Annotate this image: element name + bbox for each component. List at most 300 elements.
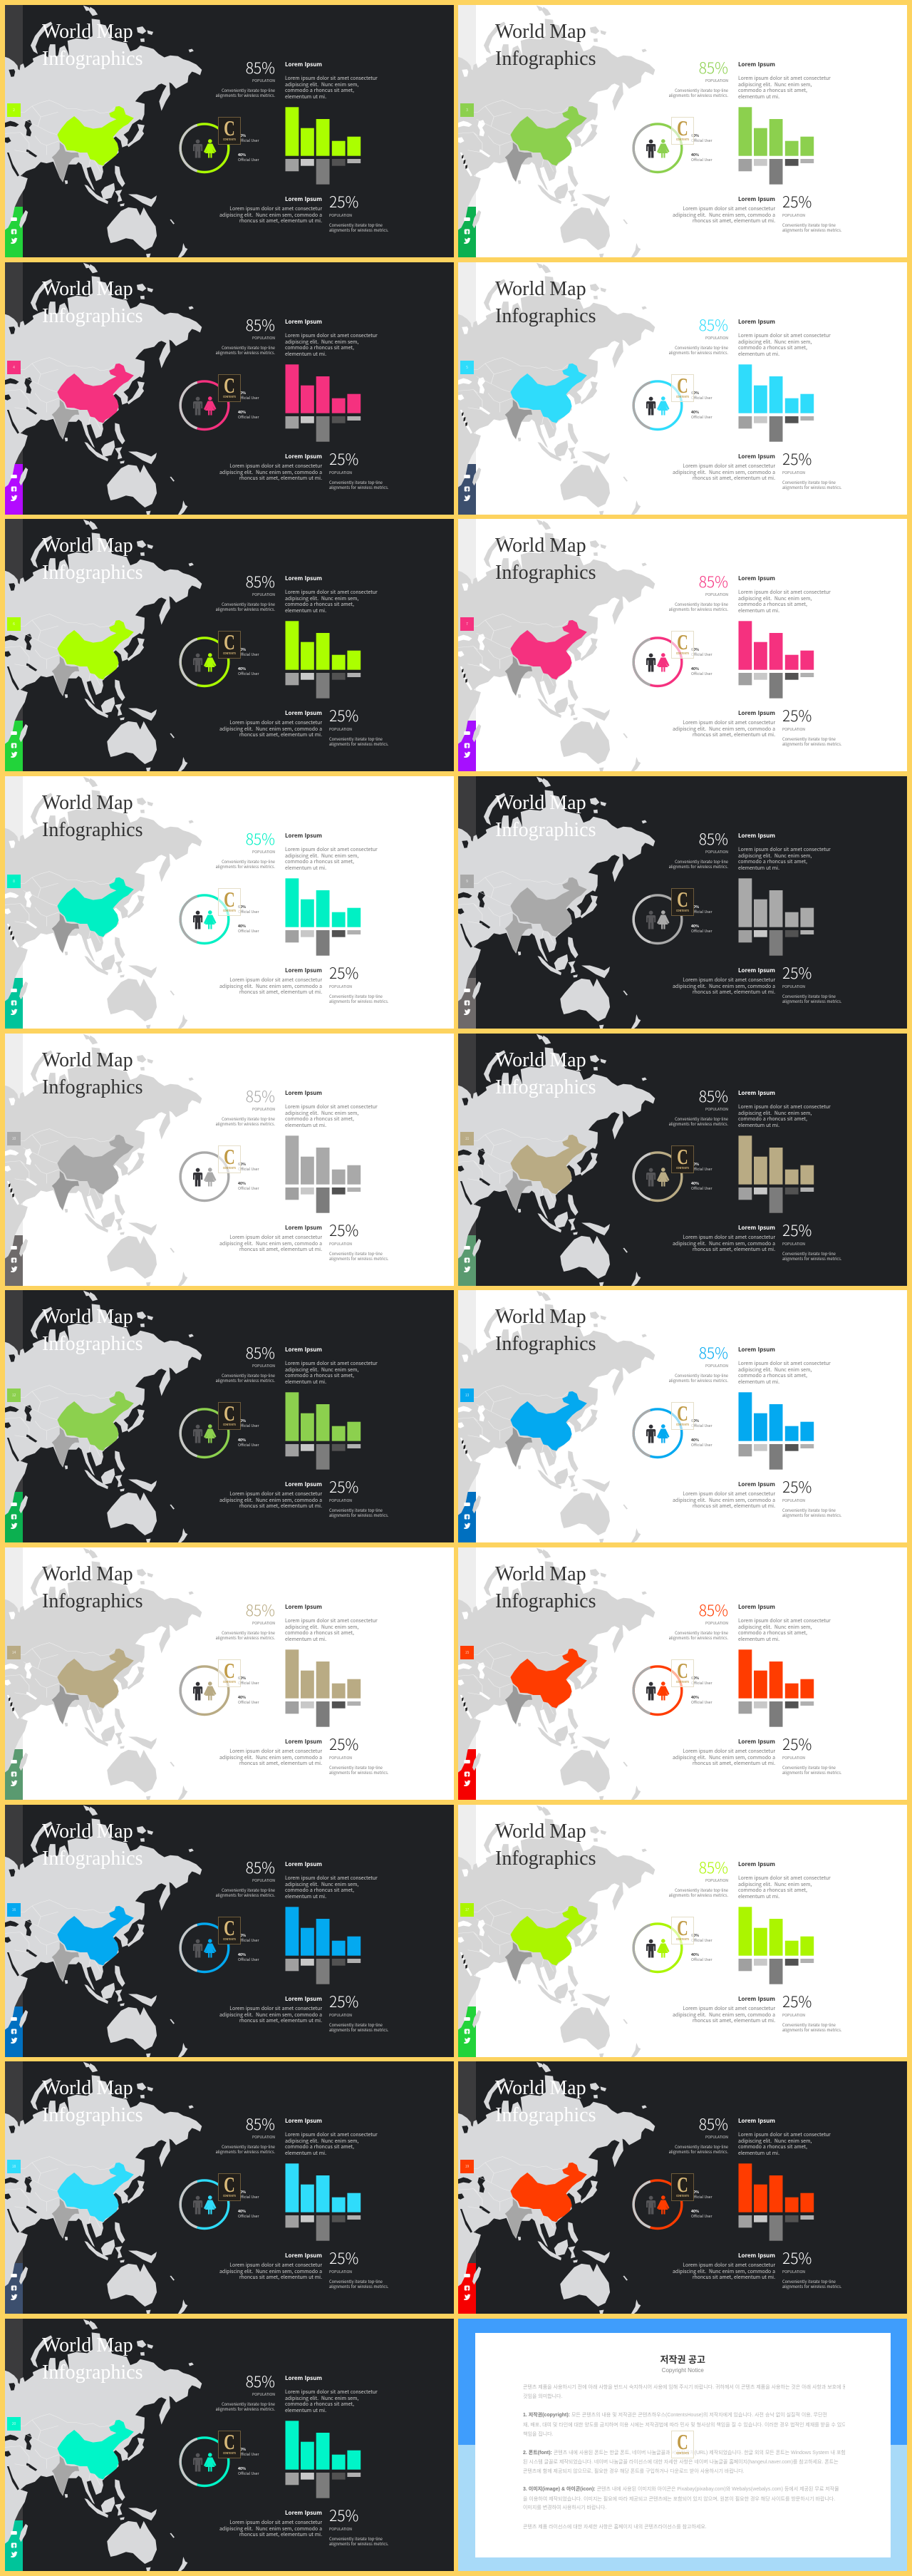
stat: 25% population <box>782 1736 868 1775</box>
title: Infographics <box>42 2104 143 2126</box>
page number tab: 4 <box>13 365 15 370</box>
title <box>42 1561 143 1615</box>
stat: 85% population: POPULATION <box>705 1364 728 1369</box>
legend <box>691 647 712 676</box>
text block: Lorem ipsum dolor sit amet consectetur adipiscing elit. Nunc enim sem, commodo a rhoncus sit amet, elementum ut mi. <box>285 2388 378 2413</box>
text block: Lorem ipsum dolor sit amet consectetur adipiscing elit. Nunc enim sem, commodo a rhoncus sit amet, elementum ut mi. <box>285 331 378 357</box>
bottom text block: Lorem Ipsum <box>285 967 322 974</box>
legend: Official User <box>691 671 712 676</box>
notice body text: 콘텐츠에 함께 제공되지 않으므로, 필요한 경우 해당 폰트를 구입하거나 다운로드 받아 사용하시기 바랍니다. <box>523 2469 745 2474</box>
legend: 60% <box>691 647 699 652</box>
stat: 25% population: 25% <box>329 705 358 726</box>
legend: 40% <box>691 924 699 929</box>
stat: 85% population: Conveniently iterate top-line <box>675 1373 728 1379</box>
legend: Official User <box>238 1167 259 1172</box>
legend: Official User <box>238 2195 259 2200</box>
panel: slide 16 dark blue <box>5 1805 454 2057</box>
legend: Official User <box>238 158 259 163</box>
stat: 85% population: Conveniently iterate top-line <box>222 88 275 93</box>
watermark logo <box>218 888 241 916</box>
page number tab: 2 <box>13 108 15 113</box>
legend <box>691 1933 712 1962</box>
stat: 25% population: Conveniently iterate top-line <box>782 1765 836 1771</box>
panel: slide 17 white lime <box>458 1805 907 2057</box>
text block: Lorem Ipsum <box>285 2117 322 2125</box>
watermark logo: CONTENTS <box>223 1680 236 1684</box>
text block <box>738 1604 866 1642</box>
title: Infographics <box>42 2361 143 2384</box>
watermark logo: CONTENTS <box>223 138 236 141</box>
sidebar <box>5 1034 23 1286</box>
donut with people icons <box>179 380 229 431</box>
watermark logo <box>671 374 694 402</box>
stat: 85% population: POPULATION <box>705 592 728 597</box>
legend: Official User <box>238 1700 259 1705</box>
social icons <box>10 475 17 501</box>
stat: 25% population: Conveniently iterate top-line <box>782 480 836 485</box>
bottom text block: Lorem Ipsum <box>738 2251 775 2260</box>
stat: 25% population: POPULATION <box>329 1242 352 1247</box>
notice subtitle: Copyright Notice <box>662 2367 704 2374</box>
bottom text block: Lorem ipsum dolor sit amet consectetur adipiscing elit. Nunc enim sem, commodo a rhoncus sit amet, elementum ut mi. <box>673 2004 775 2024</box>
title: Infographics <box>495 1333 596 1355</box>
legend <box>238 647 259 676</box>
title: World Map <box>42 21 133 43</box>
stat: 25% population: 25% <box>782 705 812 726</box>
title <box>42 1304 143 1358</box>
title: World Map <box>495 1820 586 1843</box>
text block: Lorem ipsum dolor sit amet consectetur adipiscing elit. Nunc enim sem, commodo a rhoncus sit amet, elementum ut mi. <box>285 1103 378 1128</box>
watermark logo: CONTENTS <box>676 1423 689 1426</box>
stat: 25% population: POPULATION <box>329 727 352 732</box>
text block: Lorem Ipsum <box>285 2374 322 2382</box>
bottom text block <box>219 195 322 224</box>
stat: 25% population: 25% <box>782 1991 812 2012</box>
stat: 25% population: 25% <box>782 191 812 212</box>
title: Infographics <box>42 1848 143 1870</box>
text block <box>738 1090 866 1128</box>
stat: 85% population: alignments for wireless metrics. <box>669 607 728 612</box>
sidebar <box>458 1290 476 1542</box>
legend: 40% <box>691 1181 699 1186</box>
bottom text block: Lorem ipsum dolor sit amet consectetur adipiscing elit. Nunc enim sem, commodo a rhoncus sit amet, elementum ut mi. <box>219 1747 322 1766</box>
legend: 60% <box>238 905 246 910</box>
stat: 25% population: 25% <box>782 1220 812 1241</box>
world map <box>5 262 202 515</box>
bottom text block: Lorem Ipsum <box>738 452 775 460</box>
social icons <box>458 2006 476 2057</box>
stat: 85% population: alignments for wireless metrics. <box>669 1892 728 1898</box>
bottom text block: Lorem ipsum dolor sit amet consectetur adipiscing elit. Nunc enim sem, commodo a rhoncus sit amet, elementum ut mi. <box>219 718 322 738</box>
page number tab: 9 <box>466 879 468 884</box>
bottom text block: Lorem Ipsum <box>285 195 322 202</box>
donut with people icons <box>629 1148 686 1205</box>
legend: Official User <box>238 671 259 676</box>
legend: 40% <box>691 153 699 158</box>
watermark logo: CONTENTS <box>676 1680 689 1684</box>
legend: 40% <box>238 2466 246 2471</box>
legend: Official User <box>691 2195 712 2200</box>
stat: 85% population: 85% <box>246 1086 275 1107</box>
watermark logo: CONTENTS <box>223 1937 236 1941</box>
panel: slide 7 white pink <box>458 519 907 771</box>
legend: Official User <box>691 1938 712 1943</box>
title: Infographics <box>42 1333 143 1355</box>
panel: slide 20 dark turquoise <box>5 2319 454 2571</box>
bottom text block <box>665 1481 775 1509</box>
bottom text block: Lorem ipsum dolor sit amet consectetur adipiscing elit. Nunc enim sem, commodo a rhoncus sit amet, elementum ut mi. <box>673 2261 775 2280</box>
legend: Official User <box>238 1423 259 1428</box>
social icons <box>463 475 470 501</box>
title <box>495 1818 596 1872</box>
watermark logo <box>218 2431 241 2458</box>
bar chart <box>738 1907 817 1985</box>
social icons <box>458 1492 476 1542</box>
legend: Official User <box>238 2471 259 2476</box>
watermark logo <box>671 117 694 145</box>
stat: 25% population: alignments for wireless metrics. <box>782 2284 841 2289</box>
stat: 85% population <box>669 57 728 98</box>
bottom text block: Lorem ipsum dolor sit amet consectetur adipiscing elit. Nunc enim sem, commodo a rhoncus sit amet, elementum ut mi. <box>219 2261 322 2280</box>
stat: 85% population: POPULATION <box>252 336 275 341</box>
stat: 85% population: Conveniently iterate top-line <box>675 1887 728 1893</box>
stat: 25% population <box>329 965 415 1004</box>
bottom text block: Lorem ipsum dolor sit amet consectetur adipiscing elit. Nunc enim sem, commodo a rhoncus sit amet, elementum ut mi. <box>673 1747 775 1766</box>
stat: 85% population <box>196 2116 275 2155</box>
text block: Lorem ipsum dolor sit amet consectetur adipiscing elit. Nunc enim sem, commodo a rhoncus sit amet, elementum ut mi. <box>738 845 831 871</box>
stat: 85% population: Conveniently iterate top-line <box>222 1116 275 1122</box>
donut with people icons <box>176 1661 233 1719</box>
donut with people icons <box>629 890 686 947</box>
stat: 85% population: POPULATION <box>705 1621 728 1626</box>
stat: 25% population: alignments for wireless metrics. <box>329 1256 388 1262</box>
bottom text block: Lorem ipsum dolor sit amet consectetur adipiscing elit. Nunc enim sem, commodo a rhoncus sit amet, elementum ut mi. <box>673 718 775 738</box>
page number tab <box>460 2160 474 2173</box>
watermark logo: CONTENTS <box>223 2194 236 2198</box>
text block <box>738 1861 866 1900</box>
stat: 25% population: POPULATION <box>782 1242 805 1247</box>
bottom text block: Lorem Ipsum <box>738 967 775 974</box>
title <box>42 532 143 587</box>
text block: Lorem Ipsum <box>738 575 775 582</box>
blue header band <box>458 2319 907 2445</box>
stat: 85% population <box>196 574 275 612</box>
bottom text block: Lorem Ipsum <box>738 1223 775 1232</box>
stat: 25% population: 25% <box>782 1733 812 1755</box>
bar chart <box>738 1135 817 1214</box>
page number tab: 20 <box>12 2421 16 2426</box>
text block: Lorem Ipsum <box>285 1860 322 1868</box>
panel: slide 13 white blue <box>458 1290 907 1542</box>
social icons <box>10 217 17 244</box>
page number tab: 11 <box>465 1136 469 1141</box>
legend <box>238 1933 259 1962</box>
bar chart <box>285 2421 363 2499</box>
text block: Lorem Ipsum <box>738 61 775 68</box>
panel: slide 3 white green <box>458 5 907 257</box>
text block: Lorem ipsum dolor sit amet consectetur adipiscing elit. Nunc enim sem, commodo a rhoncus sit amet, elementum ut mi. <box>738 1617 831 1642</box>
legend: Official User <box>691 1700 712 1705</box>
donut with people icons <box>629 1919 686 1976</box>
stat: 85% population: alignments for wireless metrics. <box>669 1635 728 1641</box>
bar chart <box>738 107 814 185</box>
social icons <box>458 721 476 771</box>
sidebar <box>458 5 476 257</box>
text block <box>285 2375 413 2413</box>
stat: 85% population: Conveniently iterate top-line <box>222 1630 275 1636</box>
legend: 60% <box>238 2447 246 2452</box>
legend: Official User <box>238 138 259 143</box>
title: Infographics <box>495 1076 596 1098</box>
watermark logo: CONTENTS <box>676 1937 689 1941</box>
text block: Lorem ipsum dolor sit amet consectetur adipiscing elit. Nunc enim sem, commodo a rhoncus sit amet, elementum ut mi. <box>738 74 831 100</box>
title <box>495 21 596 70</box>
bottom text block: Lorem ipsum dolor sit amet consectetur adipiscing elit. Nunc enim sem, commodo a rhoncus sit amet, elementum ut mi. <box>219 462 322 481</box>
notice body text: 을 이용하여 제작되었습니다. 이미지는 필요에 따라 제공되고 콘텐츠에는 포함되어 있지 않으며, 원본이 필요한 경우 해당 사이트를 방문하시기 바랍니다. <box>523 2497 835 2502</box>
bottom text block <box>212 2509 322 2538</box>
legend: 60% <box>691 2190 699 2195</box>
text block: Lorem ipsum dolor sit amet consectetur adipiscing elit. Nunc enim sem, commodo a rhoncus sit amet, elementum ut mi. <box>285 1617 378 1642</box>
text block <box>738 61 831 100</box>
panel: slide 10 white gray <box>5 1034 454 1286</box>
sidebar <box>458 776 476 1029</box>
title <box>495 1047 596 1101</box>
bottom text block: Lorem Ipsum <box>738 1994 775 2003</box>
watermark logo: CONTENTS <box>223 395 236 398</box>
stat: 85% population: 85% <box>699 2113 728 2135</box>
stat: 25% population: 25% <box>329 2247 358 2269</box>
legend: Official User <box>238 929 259 934</box>
title: Infographics <box>495 819 596 841</box>
page number tab <box>460 617 474 631</box>
donut with people icons <box>176 1919 233 1976</box>
legend: 60% <box>238 133 246 138</box>
text block: Lorem ipsum dolor sit amet consectetur adipiscing elit. Nunc enim sem, commodo a rhoncus sit amet, elementum ut mi. <box>285 74 378 100</box>
watermark logo <box>218 1402 241 1430</box>
stat: 25% population: 25% <box>329 2505 358 2526</box>
stat: 85% population: 85% <box>699 828 728 850</box>
stat: 85% population: alignments for wireless metrics. <box>669 1121 728 1127</box>
sidebar <box>5 2319 23 2571</box>
world map <box>458 2061 906 2314</box>
stat: 85% population: 85% <box>699 571 728 592</box>
page number tab: 13 <box>465 1393 469 1398</box>
watermark logo: CONTENTS <box>676 2451 689 2455</box>
watermark logo <box>671 1145 694 1173</box>
legend: Official User <box>238 415 259 420</box>
world map <box>458 519 906 771</box>
stat: 25% population: 25% <box>329 962 358 984</box>
stat: 25% population: POPULATION <box>329 2527 352 2532</box>
title: Infographics <box>42 1590 143 1612</box>
legend: Official User <box>238 396 259 401</box>
stat: 85% population <box>649 1088 728 1127</box>
panel: slide 15 white red <box>458 1547 907 1800</box>
stat: 25% population <box>782 1994 868 2033</box>
page number tab: 7 <box>466 622 468 627</box>
legend: Official User <box>238 2214 259 2219</box>
legend: Official User <box>238 1443 259 1448</box>
stat: 85% population: POPULATION <box>252 78 275 83</box>
text block: Lorem Ipsum <box>285 575 322 582</box>
legend: Official User <box>691 1957 712 1962</box>
legend <box>691 1418 712 1448</box>
stat: 25% population: 25% <box>782 962 812 984</box>
stat: 25% population: alignments for wireless metrics. <box>782 1256 841 1262</box>
stat: 85% population: POPULATION <box>705 1878 728 1883</box>
legend: 40% <box>691 2209 699 2214</box>
legend <box>238 905 259 934</box>
stat: 25% population: Conveniently iterate top-line <box>329 222 383 228</box>
panel: slide 12 dark green <box>5 1290 454 1542</box>
stat: 25% population: Conveniently iterate top-line <box>782 2279 836 2284</box>
legend: Official User <box>691 1423 712 1428</box>
legend: Official User <box>691 2214 712 2219</box>
title <box>42 2332 143 2386</box>
stat: 85% population <box>649 2116 728 2155</box>
stat: 25% population: POPULATION <box>329 1756 352 1761</box>
watermark logo <box>218 1659 241 1687</box>
text block: Lorem Ipsum <box>738 832 775 840</box>
stat: 25% population: Conveniently iterate top-line <box>329 1251 383 1257</box>
stat: 25% population: alignments for wireless metrics. <box>782 485 841 490</box>
bottom text block <box>665 2252 775 2280</box>
stat: 25% population: alignments for wireless metrics. <box>329 227 388 233</box>
legend: 40% <box>238 1438 246 1443</box>
stat: 85% population <box>216 314 275 356</box>
panel: slide 8 white turquoise <box>5 776 454 1029</box>
stat: 85% population: Conveniently iterate top-line <box>675 1116 728 1122</box>
sidebar <box>5 519 23 771</box>
bottom text block: Lorem ipsum dolor sit amet consectetur adipiscing elit. Nunc enim sem, commodo a rhoncus sit amet, elementum ut mi. <box>219 1490 322 1509</box>
donut with people icons <box>176 2175 233 2232</box>
title: Infographics <box>42 819 143 841</box>
stat: 85% population: Conveniently iterate top-line <box>675 2144 728 2150</box>
legend: 40% <box>691 666 699 671</box>
title: World Map <box>495 1306 586 1328</box>
stat: 25% population: POPULATION <box>329 2270 352 2274</box>
legend: 40% <box>691 410 699 415</box>
bottom text block <box>212 2252 322 2280</box>
stat: 25% population: Conveniently iterate top-line <box>782 736 836 742</box>
bar chart <box>738 1392 817 1470</box>
stat: 85% population: 85% <box>246 1857 275 1878</box>
text block <box>285 833 413 871</box>
bottom text block: Lorem ipsum dolor sit amet consectetur adipiscing elit. Nunc enim sem, commodo a rhoncus sit amet, elementum ut mi. <box>219 976 322 995</box>
world map <box>5 1547 453 1800</box>
bottom text block <box>665 967 775 995</box>
text block: Lorem ipsum dolor sit amet consectetur adipiscing elit. Nunc enim sem, commodo a rhoncus sit amet, elementum ut mi. <box>738 588 831 614</box>
legend: 60% <box>238 1418 246 1423</box>
stat: 85% population: Conveniently iterate top-line <box>675 1630 728 1636</box>
social icons <box>5 721 23 771</box>
title: Infographics <box>495 1590 596 1612</box>
title <box>42 790 143 844</box>
stat: 85% population: 85% <box>246 571 275 592</box>
text block: Lorem Ipsum <box>285 61 322 68</box>
stat: 85% population: alignments for wireless metrics. <box>216 1378 275 1384</box>
sidebar <box>5 1290 23 1542</box>
world map <box>458 1034 906 1286</box>
panel: copyright notice <box>458 2319 907 2571</box>
stat: 85% population: alignments for wireless metrics. <box>669 93 728 98</box>
social icons <box>5 1492 23 1542</box>
bar chart <box>738 621 817 699</box>
stat: 25% population: alignments for wireless metrics. <box>329 2284 388 2289</box>
bottom text block: Lorem Ipsum <box>285 1738 322 1745</box>
text block <box>738 1346 866 1385</box>
text block: Lorem Ipsum <box>738 1603 775 1611</box>
stat: 85% population: POPULATION <box>705 2135 728 2140</box>
stat: 85% population: alignments for wireless metrics. <box>216 2149 275 2155</box>
stat: 85% population: alignments for wireless metrics. <box>669 2149 728 2155</box>
stat: 25% population: POPULATION <box>782 984 805 989</box>
sidebar <box>5 1805 23 2057</box>
stat: 25% population: POPULATION <box>782 213 805 218</box>
bottom text block: Lorem Ipsum <box>285 2251 322 2260</box>
bottom text block <box>212 1481 322 1509</box>
stat: 85% population: alignments for wireless metrics. <box>216 2406 275 2412</box>
stat: 25% population: POPULATION <box>329 1498 352 1503</box>
legend: Official User <box>691 158 712 163</box>
stat: 85% population: 85% <box>699 1857 728 1878</box>
text block <box>285 1604 413 1642</box>
text block <box>285 1861 413 1900</box>
page number tab: 15 <box>465 1650 469 1655</box>
stat: 25% population <box>782 708 868 747</box>
watermark logo: CONTENTS <box>676 909 689 912</box>
stat: 25% population: 25% <box>329 1220 358 1241</box>
stat: 25% population: POPULATION <box>782 2013 805 2018</box>
stat: 25% population: Conveniently iterate top-line <box>329 480 383 485</box>
bottom text block: Lorem Ipsum <box>738 709 775 717</box>
stat: 85% population: 85% <box>246 57 275 78</box>
legend: 60% <box>238 2190 246 2195</box>
page number tab: 6 <box>13 622 15 627</box>
page number tab <box>7 1132 21 1145</box>
stat: 85% population <box>649 1860 728 1898</box>
page number tab: 3 <box>466 108 468 113</box>
world map <box>5 519 453 771</box>
text block: Lorem ipsum dolor sit amet consectetur adipiscing elit. Nunc enim sem, commodo a rhoncus sit amet, elementum ut mi. <box>285 845 378 871</box>
stat: 85% population: Conveniently iterate top-line <box>222 2144 275 2150</box>
watermark logo: CONTENTS <box>676 1166 689 1170</box>
stat: 85% population: Conveniently iterate top-line <box>222 1887 275 1893</box>
stat: 85% population: 85% <box>246 2371 275 2392</box>
stat: 25% population: Conveniently iterate top-line <box>782 994 836 999</box>
legend <box>238 391 259 420</box>
bar chart <box>285 621 363 699</box>
stat: 85% population <box>196 831 275 870</box>
stat: 25% population: POPULATION <box>782 1498 805 1503</box>
title <box>42 2075 143 2129</box>
text block: Lorem ipsum dolor sit amet consectetur adipiscing elit. Nunc enim sem, commodo a rhoncus sit amet, elementum ut mi. <box>738 1103 831 1128</box>
watermark logo <box>671 2431 694 2458</box>
text block: Lorem ipsum dolor sit amet consectetur adipiscing elit. Nunc enim sem, commodo a rhoncus sit amet, elementum ut mi. <box>738 2131 831 2156</box>
bottom text block: Lorem Ipsum <box>738 195 775 202</box>
stat: 25% population: 25% <box>329 1991 358 2012</box>
sidebar <box>458 1547 476 1800</box>
text block <box>285 61 378 100</box>
legend: Official User <box>238 2452 259 2457</box>
stat: 85% population: Conveniently iterate top-line <box>222 602 275 607</box>
stat: 25% population <box>329 708 415 747</box>
legend: Official User <box>691 415 712 420</box>
stat: 25% population: Conveniently iterate top-line <box>782 222 836 228</box>
stat: 85% population <box>196 1860 275 1898</box>
legend <box>691 905 712 934</box>
notice body text: 된 시스템 글꼴로 제작되었습니다. 네이버 나눔글꼴 라이선스에 대한 자세한 사항은 네이버 나눔글꼴 홈페이지(hangeul.naver.com)를 참고하세요. 폰트는 <box>523 2460 839 2465</box>
